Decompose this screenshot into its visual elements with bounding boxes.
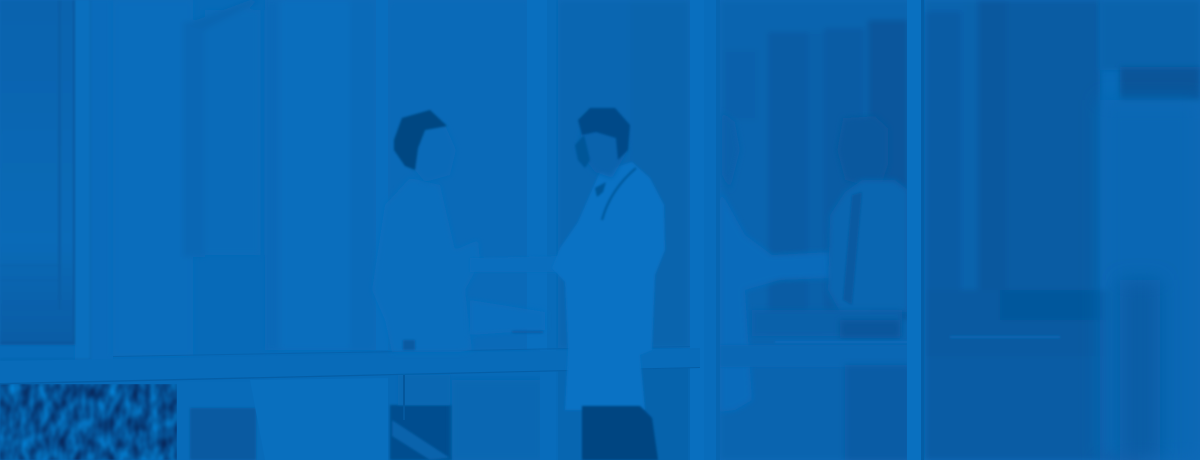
figure: woman in white coat (372, 110, 480, 420)
interior lower area (177, 382, 265, 460)
legs below rail (398, 375, 450, 405)
hair (394, 110, 447, 170)
figure: doctor in white coat with stethoscope (552, 108, 665, 460)
reflected figures in the right glass (720, 112, 1060, 460)
reflection: railings (752, 310, 902, 336)
lower glass: outdoor view and floor (0, 368, 690, 460)
reflection: man in shirt and tie (837, 116, 888, 190)
tie (595, 182, 606, 197)
hand detail (403, 340, 415, 350)
handshake and paperwork (470, 256, 560, 335)
vertical mullions and transom (0, 0, 924, 460)
coat (552, 162, 665, 410)
beard (575, 135, 590, 168)
left window pane (0, 0, 113, 380)
face (578, 125, 628, 178)
stethoscope (602, 168, 636, 220)
right glass: dark reflected interior (720, 0, 1140, 460)
reflection: woman with outstretched arm (720, 190, 832, 412)
upper glass: interior reflection (113, 0, 690, 356)
far right blurred passer-by area (1100, 0, 1200, 460)
hair (578, 108, 630, 160)
trees seen through the window (0, 384, 177, 460)
trousers (582, 406, 658, 460)
